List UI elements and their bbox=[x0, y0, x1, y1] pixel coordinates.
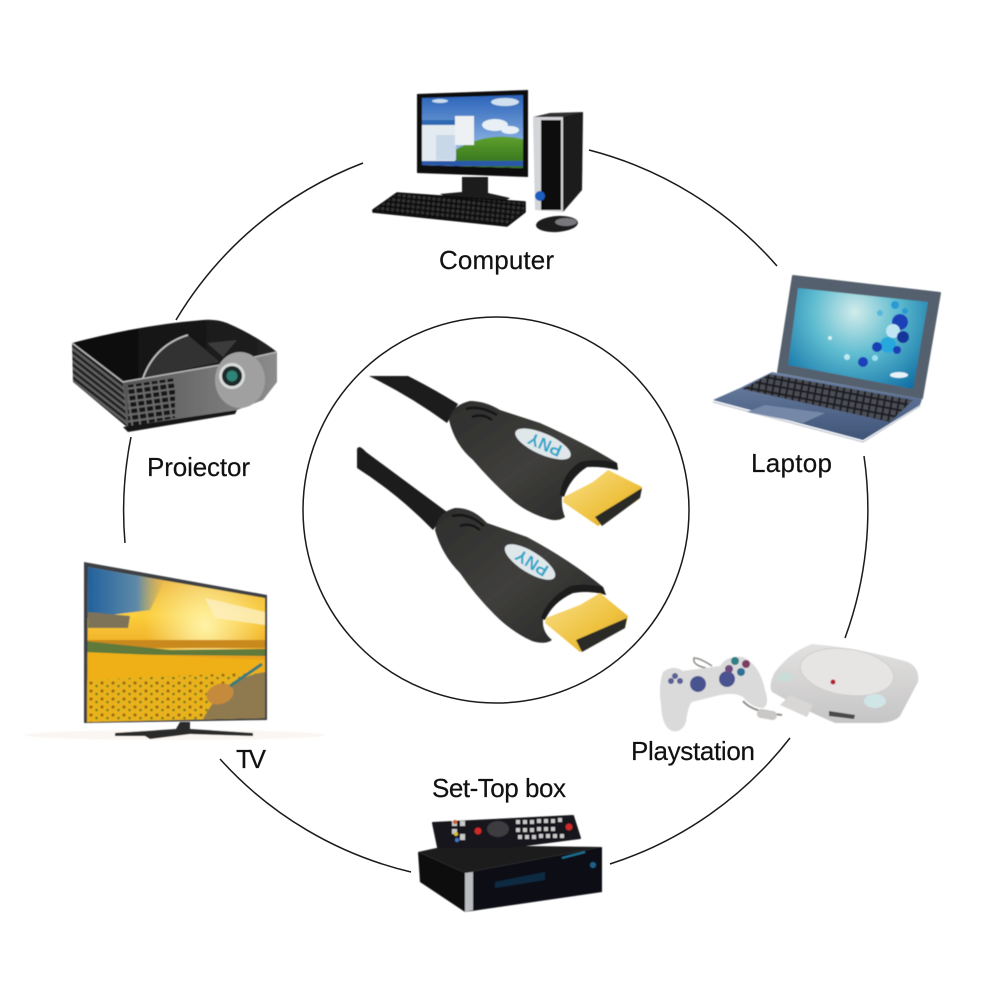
laptop screen bbox=[785, 285, 931, 391]
PC tower bbox=[533, 112, 583, 212]
arc: projector to computer bbox=[176, 163, 363, 320]
arc: playstation to set-top box bbox=[610, 738, 790, 864]
projector feet bbox=[123, 410, 237, 432]
lower cable bbox=[357, 447, 447, 530]
TV frame bbox=[84, 562, 267, 723]
arc: laptop to playstation bbox=[845, 456, 868, 638]
laptop keyboard bbox=[742, 374, 913, 422]
label: Set-Top box: Set-Top box bbox=[432, 773, 566, 803]
logo text: PNY bbox=[512, 545, 552, 580]
projector side bbox=[72, 343, 127, 427]
label: Laptop: Laptop bbox=[751, 448, 832, 478]
monitor screen bbox=[420, 94, 526, 170]
TV stand bbox=[115, 722, 253, 739]
device: set-top box bbox=[418, 816, 602, 912]
central circle bbox=[303, 317, 689, 703]
monitor stand bbox=[440, 177, 510, 201]
label: TV: TV bbox=[236, 744, 267, 774]
console bbox=[771, 643, 918, 723]
infographic canvas bbox=[26, 89, 942, 913]
outer connection ring bbox=[124, 150, 868, 872]
projector front bbox=[123, 352, 277, 427]
keyboard bbox=[373, 193, 525, 226]
device: laptop bbox=[713, 276, 940, 442]
arc: set-top box to TV bbox=[220, 759, 411, 872]
laptop trackpad bbox=[747, 405, 825, 423]
projector top bbox=[72, 320, 277, 382]
laptop lid bbox=[778, 276, 940, 398]
arc: computer to laptop bbox=[589, 150, 777, 266]
projector grille bbox=[128, 378, 175, 427]
mouse bbox=[535, 215, 579, 233]
upper connector bbox=[449, 401, 642, 526]
arc: TV to projector bbox=[124, 437, 131, 543]
device: TV bbox=[25, 562, 325, 740]
upper cable bbox=[369, 376, 458, 423]
device: projector bbox=[72, 320, 277, 432]
receiver bbox=[418, 845, 602, 912]
monitor bbox=[417, 90, 528, 177]
lower connector bbox=[435, 508, 628, 652]
label: Computer: Computer bbox=[439, 245, 554, 275]
projector lens bbox=[215, 352, 265, 408]
TV screen image bbox=[85, 565, 267, 725]
controller cable and plug bbox=[743, 695, 813, 721]
TV glow bbox=[25, 730, 325, 740]
laptop base bbox=[713, 372, 922, 440]
device: computer bbox=[373, 90, 583, 233]
device: playstation bbox=[660, 643, 918, 731]
logo text: PNY bbox=[525, 428, 565, 460]
HDMI cable illustration bbox=[357, 376, 642, 652]
remote control bbox=[433, 816, 580, 847]
label: Proiector: Proiector bbox=[147, 452, 250, 482]
controller bbox=[660, 657, 767, 731]
label: Playstation: Playstation bbox=[631, 736, 755, 766]
